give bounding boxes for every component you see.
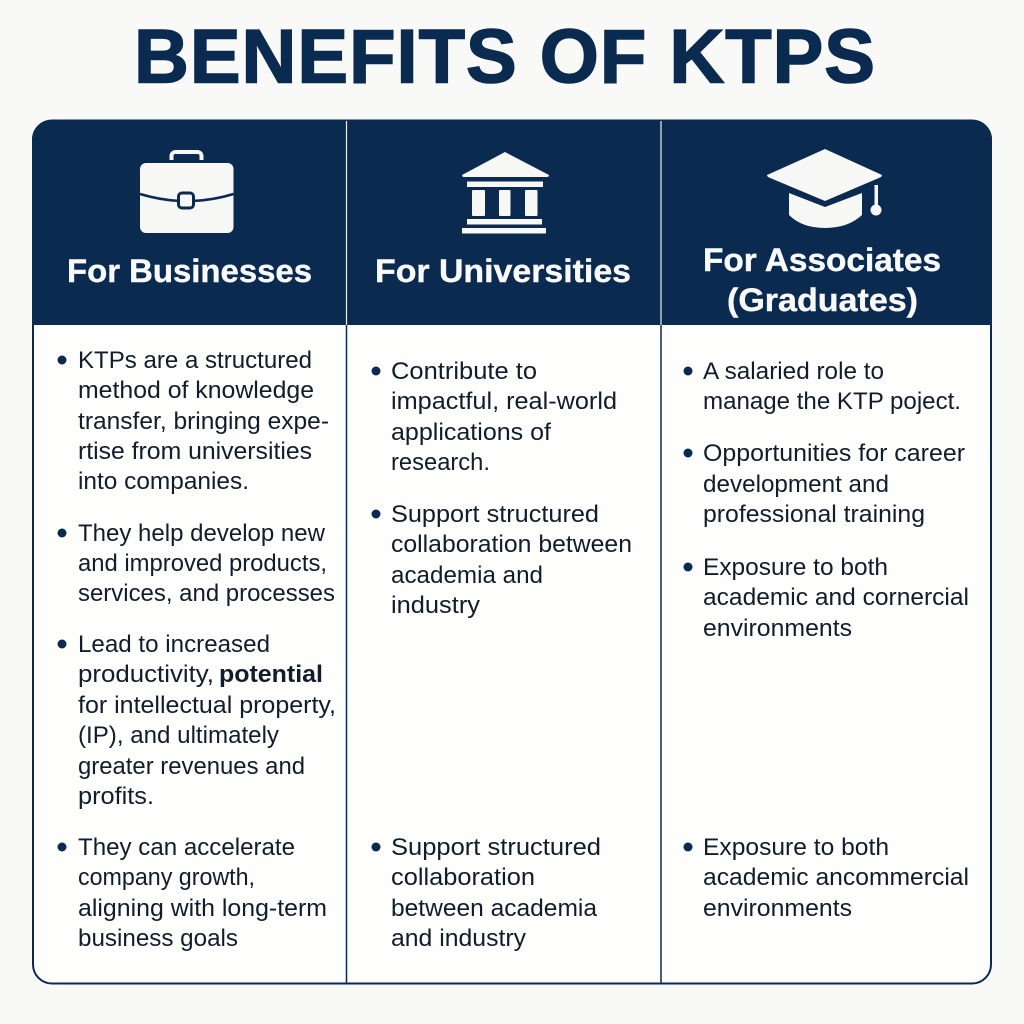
panel: for universities header (375, 152, 631, 289)
bullet: career development: Opportunities for career (703, 440, 965, 467)
heading: for associates (graduates): (Graduates) (727, 282, 918, 318)
bullet: structured collaboration: academia and (391, 562, 543, 589)
bullet: knowledge transfer: transfer, bringing expe- (78, 408, 329, 435)
bullet: salaried role: manage the KTP poject. (703, 388, 961, 415)
bullet: academic and commercial exposure: Exposure to both (703, 554, 888, 581)
bullet: structured collaboration repeat: Support structured (391, 834, 601, 861)
bullet: productivity and revenue (58, 631, 336, 810)
bullet: real-world research (372, 358, 617, 476)
bullet: company growth: aligning with long-term (78, 895, 327, 922)
bullet: knowledge transfer: rtise from universities (78, 438, 312, 465)
bullet: structured collaboration (372, 501, 632, 619)
bullet: productivity and revenue: potential (219, 661, 323, 688)
bullet: products and services (58, 520, 335, 607)
bullet: real-world research: impactful, real-world (391, 388, 617, 415)
bullet: structured collaboration repeat: between academia (391, 895, 597, 922)
bullet: real-world research: Contribute to (391, 358, 537, 385)
bullet: structured collaboration repeat (372, 834, 601, 952)
bullet: knowledge transfer (58, 347, 329, 495)
bullet: productivity and revenue: greater revenues and (78, 753, 305, 780)
panel: for businesses header (67, 152, 312, 289)
bullet: productivity and revenue: (IP), and ultimately (78, 722, 280, 749)
bullet: products and services: and improved products, (78, 550, 327, 577)
bullet: structured collaboration repeat: collaboration (391, 864, 535, 891)
title: BENEFITS OF KTPS (134, 14, 875, 100)
bullet: company growth: business goals (78, 925, 238, 952)
bullet: company growth (58, 834, 327, 952)
bullet: exposure repeat: environments (703, 895, 852, 922)
bullet: knowledge transfer: KTPs are a structured (78, 347, 312, 374)
text block: businesses bullets (58, 347, 336, 952)
bullet: products and services: They help develop new (78, 520, 325, 547)
bullet: knowledge transfer: method of knowledge (78, 377, 314, 404)
heading: for associates (graduates): For Associates (703, 242, 941, 278)
bullet: structured collaboration: industry (391, 592, 481, 619)
panel: table (32, 120, 992, 984)
bullet: products and services: services, and processes (78, 580, 335, 607)
bullet: career development (684, 440, 965, 528)
bullet: salaried role (684, 358, 961, 415)
bullet: exposure repeat: Exposure to both (703, 834, 889, 861)
bullet: company growth: company growth, (78, 864, 255, 891)
icon: briefcase (140, 152, 234, 233)
bullet: real-world research: applications of (391, 419, 551, 446)
bullet: real-world research: research. (391, 449, 490, 476)
icon: university building (462, 152, 549, 234)
bullet: academic and commercial exposure: environments (703, 615, 852, 642)
bullet: academic and commercial exposure (684, 554, 969, 642)
bullet: productivity and revenue: productivity, (78, 661, 214, 688)
bullet: career development: development and (703, 471, 889, 498)
bullet: structured collaboration: collaboration between (391, 531, 632, 558)
text block: associates bullets (684, 358, 969, 922)
bullet: structured collaboration: Support structured (391, 501, 599, 528)
bullet: productivity and revenue: for intellectual property, (78, 692, 336, 719)
heading: for universities: For Universities (375, 253, 631, 289)
bullet: career development: professional training (703, 501, 925, 528)
bullet: productivity and revenue: Lead to increased (78, 631, 270, 658)
bullet: exposure repeat: academic ancommercial (703, 864, 969, 891)
bullet: structured collaboration repeat: and industry (391, 925, 527, 952)
bullet: academic and commercial exposure: academic and cornercial (703, 584, 969, 611)
icon: graduation cap (767, 149, 882, 228)
bullet: company growth: They can accelerate (78, 834, 295, 861)
bullet: salaried role: A salaried role to (703, 358, 884, 385)
panel: for associates header (703, 149, 941, 318)
text block: universities bullets (372, 358, 632, 952)
heading: for associates (graduates) (703, 242, 941, 318)
bullet: knowledge transfer: into companies. (78, 468, 249, 495)
bullet: exposure repeat (684, 834, 969, 922)
heading: for businesses: For Businesses (67, 253, 312, 289)
bullet: productivity and revenue: profits. (78, 783, 154, 810)
